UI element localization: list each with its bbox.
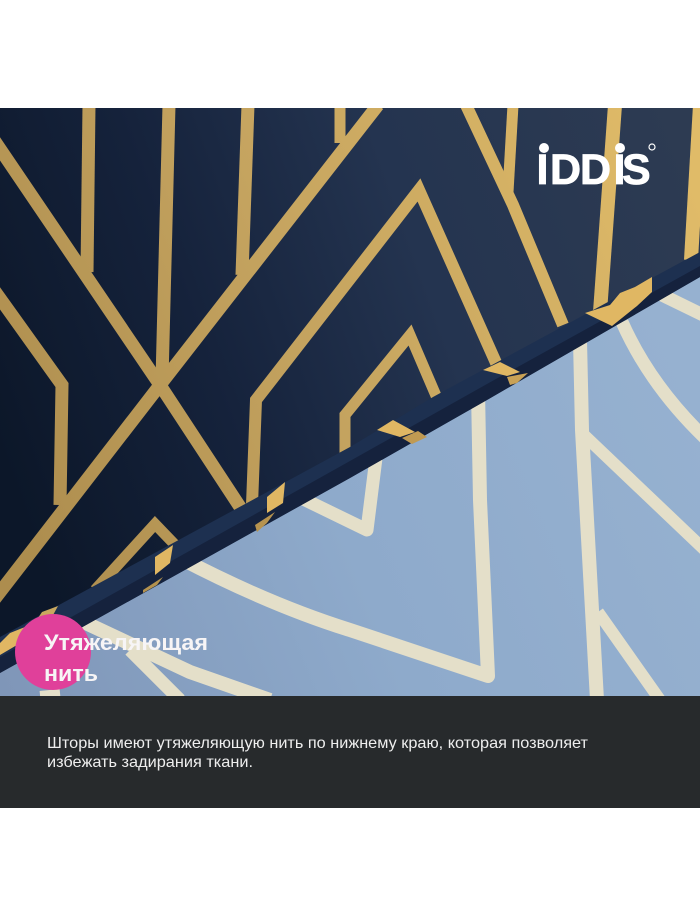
dark navy curtain side	[0, 108, 700, 637]
infographic canvas	[0, 108, 700, 808]
panel: curtain photo	[0, 105, 700, 700]
callout text: Утяжеляющая	[44, 630, 208, 655]
light blue lining side	[0, 265, 700, 700]
panel: description bar	[0, 696, 700, 808]
description text: Шторы имеют утяжеляющую нить по нижнему краю, которая позволяет	[47, 735, 589, 752]
callout: pink badge label: нить	[44, 661, 98, 686]
gold stripes on seam	[0, 277, 652, 655]
brand logo	[536, 143, 655, 194]
panel: description bar: избежать задирания ткани.	[47, 754, 253, 771]
logo wordmark: IDDIS	[536, 146, 651, 194]
gold geometric pattern	[0, 105, 700, 605]
callout: pink badge label	[15, 614, 208, 690]
cream pattern on lining	[40, 295, 700, 700]
weighted hem seam	[0, 252, 700, 673]
